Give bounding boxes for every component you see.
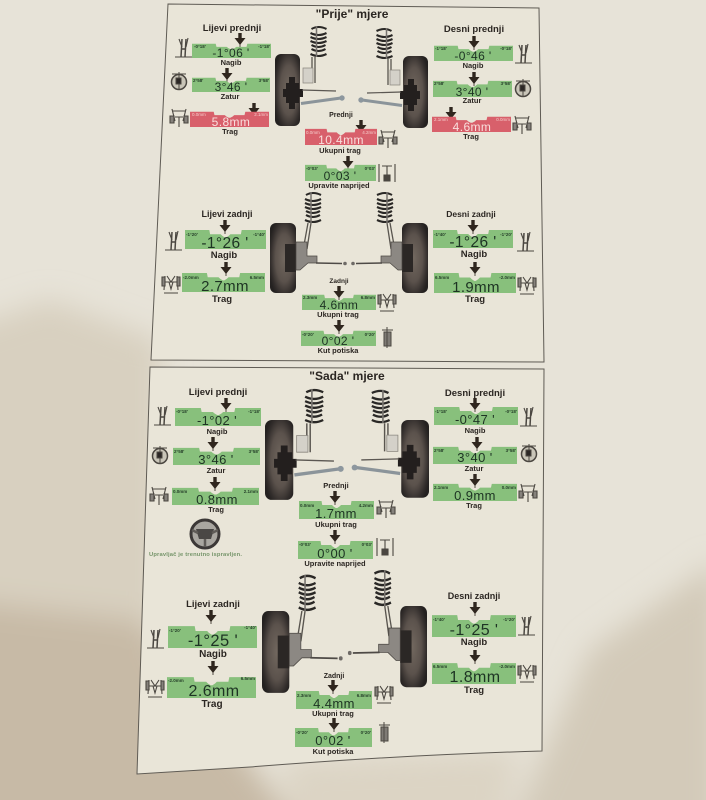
gauge: left front toe: 0.0mm [192, 112, 206, 117]
gauge: rear left camber: -1°40' [244, 625, 256, 630]
gauge: rear left toe: -2.0mm [183, 275, 199, 280]
icon: toe [518, 665, 536, 682]
arrow [468, 220, 478, 234]
icon: camber [520, 407, 537, 426]
icon: steer ahead [379, 164, 395, 182]
gauge: rear total toe: 6.8mm [361, 295, 375, 300]
gauge: steer ahead: 0°00 ' [317, 546, 353, 561]
gauge: steer ahead: 0°03 ' [324, 169, 356, 183]
gauge: left front toe: 2.1mm [254, 112, 268, 117]
panel: "Prije" measurements [151, 4, 544, 362]
gauge: right front caster: 3°40 ' [456, 85, 488, 99]
arrow [330, 491, 340, 505]
gauge: left front camber: -1°18' [248, 409, 260, 414]
gauge: rear right camber: -1°26 ' [449, 234, 497, 251]
gauge: thrust angle: 0°02 ' [322, 334, 354, 348]
arrow [220, 262, 232, 276]
label: Nagib: Nagib [461, 249, 487, 260]
gauge: right front caster: 2°58' [434, 448, 444, 453]
label: Kut potiska: Kut potiska [318, 346, 359, 355]
gauge: rear total toe: 4.6mm [320, 298, 358, 312]
arrow [220, 220, 230, 234]
gauge: rear left camber: -1°20' [186, 232, 198, 237]
rear right suspension [348, 570, 427, 687]
gauge: thrust angle [295, 728, 372, 748]
label: Nagib: Nagib [207, 427, 228, 436]
label: Ukupni trag: Ukupni trag [312, 709, 354, 718]
heading: Desni zadnji: Desni zadnji [448, 591, 500, 601]
icon: camber [165, 231, 182, 250]
gauge: right front toe: 2.1mm [434, 117, 448, 122]
label: Upravite naprijed: Upravite naprijed [304, 559, 366, 568]
icon: steering wheel [191, 520, 219, 548]
gauge: right front toe: 4.6mm [453, 120, 491, 134]
label: Zadnji: Zadnji [329, 278, 349, 285]
label: Zatur: Zatur [221, 92, 239, 101]
gauge: left front toe: 2.1mm [244, 489, 258, 494]
gauge: left front camber: -1°02 ' [197, 413, 237, 428]
gauge: rear left camber: -1°20' [169, 628, 181, 633]
gauge: left front toe: 0.8mm [196, 492, 238, 507]
arrow [208, 661, 218, 675]
gauge: right front camber: -0°47 ' [455, 412, 495, 427]
gauge: right front toe: 0.9mm [454, 488, 496, 503]
gauge: front total toe: 10.4mm [318, 133, 364, 147]
gauge: front total toe [299, 501, 374, 521]
heading: Desni zadnji: Desni zadnji [446, 209, 496, 219]
label: Nagib: Nagib [221, 58, 242, 67]
front left suspension [265, 389, 344, 500]
label: Trag: Trag [208, 505, 224, 514]
gauge: left front camber: -1°18' [258, 44, 270, 49]
heading: Lijevi zadnji: Lijevi zadnji [186, 599, 240, 610]
icon: toe [170, 109, 188, 127]
gauge: front total toe: 0.0mm [306, 130, 320, 135]
gauge: rear right camber: -1°20' [500, 232, 512, 237]
gauge: thrust angle: 0°20' [365, 332, 375, 337]
gauge: rear left camber [185, 230, 266, 252]
gauge: front total toe: 1.7mm [315, 506, 357, 521]
icon: toe [519, 484, 537, 502]
gauge: right front camber: -0°18' [505, 409, 517, 414]
rear left suspension [262, 575, 343, 693]
heading: Lijevi prednji: Lijevi prednji [203, 23, 261, 34]
label: Prednji: Prednji [329, 112, 353, 119]
gauge: right front toe [432, 117, 511, 134]
gauge: steer ahead: 0°03' [365, 166, 375, 171]
arrow [222, 68, 232, 82]
gauge: right front camber: -1°18' [435, 46, 447, 51]
gauge: rear right camber [432, 615, 516, 639]
gauge: right front caster: 3°40 ' [457, 450, 493, 465]
gauge: left front caster [192, 78, 270, 94]
gauge: left front caster [173, 448, 260, 467]
gauge: right front caster: 3°58' [501, 81, 511, 86]
heading: Desni prednji: Desni prednji [444, 24, 504, 35]
icon: camber [154, 406, 171, 425]
icon: camber [517, 232, 534, 251]
arrow [472, 437, 482, 451]
gauge: rear left camber: -1°26 ' [201, 235, 249, 252]
gauge: rear total toe: 4.4mm [313, 696, 355, 711]
gauge: rear total toe: 2.3mm [297, 693, 311, 698]
label: Nagib: Nagib [211, 250, 237, 261]
gauge: right front camber [434, 46, 513, 63]
icon: thrust [379, 722, 390, 743]
gauge: thrust angle [301, 331, 376, 348]
gauge: right front toe: 2.1mm [434, 485, 448, 490]
arrow [234, 33, 246, 47]
label: Zatur: Zatur [463, 96, 481, 105]
arrow [446, 107, 456, 121]
gauge: steer ahead: 0°03' [362, 542, 372, 547]
gauge: left front camber: -0°18' [194, 44, 206, 49]
arrow [470, 262, 480, 276]
label: Zatur: Zatur [465, 464, 483, 473]
arrow [468, 72, 480, 86]
gauge: rear left camber [168, 625, 257, 650]
gauge: rear left toe: 2.7mm [201, 278, 249, 295]
icon: total toe [377, 500, 395, 518]
gauge: left front toe: 0.0mm [173, 489, 187, 494]
gauge: thrust angle: -0°20' [296, 730, 308, 735]
icon: caster [172, 72, 186, 90]
gauge: left front camber [192, 44, 271, 60]
gauge: rear right camber: -1°20' [503, 617, 515, 622]
icon: camber [518, 616, 535, 635]
front right suspension [358, 28, 428, 128]
arrow [470, 602, 480, 616]
gauge: rear right toe [434, 273, 516, 296]
gauge: right front caster: 2°58' [434, 81, 444, 86]
gauge: steer ahead: -0°03' [299, 542, 311, 547]
gauge: thrust angle: -0°20' [302, 332, 314, 337]
title: Prije mjere: "Prije" mjere [316, 7, 389, 21]
label: Zadnji: Zadnji [324, 673, 344, 680]
gauge: front total toe: 4.2mm [359, 503, 373, 508]
gauge: rear total toe [302, 295, 376, 312]
gauge: right front toe: 0.0mm [496, 117, 510, 122]
arrow [468, 36, 480, 50]
gauge: right front camber: -0°18' [500, 46, 512, 51]
gauge: steer ahead [305, 165, 376, 183]
gauge: rear left toe: -2.0mm [168, 678, 184, 683]
gauge: rear left toe: 2.6mm [189, 683, 239, 700]
icon: camber [147, 629, 164, 648]
icon: steer ahead [377, 538, 393, 556]
icon: total toe [379, 130, 397, 148]
arrow [328, 680, 338, 694]
label: Trag: Trag [463, 132, 479, 141]
gauge: right front caster [433, 81, 512, 99]
gauge: steer ahead [298, 541, 373, 561]
gauge: left front caster: 3°58' [249, 449, 259, 454]
arrow [470, 398, 480, 412]
gauge: rear right toe: -2.0mm [499, 664, 515, 669]
heading: Lijevi prednji: Lijevi prednji [189, 387, 247, 398]
icon: total toe [378, 294, 396, 311]
icon: toe [150, 487, 168, 505]
gauge: thrust angle: 0°20' [361, 730, 371, 735]
gauge: left front caster: 2°58' [193, 78, 203, 83]
arrow [328, 718, 340, 732]
label: Trag: Trag [201, 699, 223, 710]
gauge: left front camber: -1°06 ' [212, 46, 250, 60]
label: Nagib: Nagib [463, 61, 484, 70]
gauge: rear total toe: 6.8mm [357, 693, 371, 698]
gauge: rear right toe: 1.9mm [452, 279, 500, 296]
gauge: left front camber: -0°18' [176, 409, 188, 414]
arrow [334, 320, 344, 334]
label: Prednji: Prednji [323, 481, 349, 490]
label: Nagib: Nagib [465, 426, 486, 435]
gauge: rear total toe: 2.3mm [303, 295, 317, 300]
gauge: right front caster [433, 447, 517, 465]
label: Ukupni trag: Ukupni trag [317, 310, 359, 319]
label: Trag: Trag [464, 685, 484, 696]
rear right suspension [351, 192, 428, 293]
label: Nagib: Nagib [461, 637, 487, 648]
gauge: rear right toe: 6.5mm [433, 664, 447, 669]
icon: caster [516, 79, 530, 96]
icon: toe [513, 116, 531, 134]
label: Zatur: Zatur [207, 466, 225, 475]
gauge: front total toe: 0.0mm [300, 503, 314, 508]
gauge: rear right camber [433, 230, 513, 251]
icon: toe [146, 680, 164, 697]
icon: total toe [375, 686, 393, 703]
gauge: rear right toe: -2.0mm [499, 275, 515, 280]
title: Sada mjere: "Sada" mjere [309, 369, 385, 383]
heading: Lijevi zadnji: Lijevi zadnji [201, 209, 253, 219]
label: Trag: Trag [465, 294, 485, 305]
label: Upravite naprijed: Upravite naprijed [308, 181, 370, 190]
arrow [330, 530, 340, 544]
arrow [206, 610, 216, 624]
icon: thrust [382, 327, 393, 348]
front right suspension [352, 390, 429, 498]
gauge: thrust angle: 0°02 ' [315, 733, 351, 748]
arrow [334, 286, 344, 300]
gauge: front total toe [305, 129, 377, 147]
gauge: right front toe: 0.0mm [502, 485, 516, 490]
front left suspension [275, 26, 345, 126]
gauge: rear right camber: -1°40' [434, 232, 446, 237]
arrow [248, 103, 260, 117]
label: Ukupni trag: Ukupni trag [315, 520, 357, 529]
label: Nagib: Nagib [199, 649, 227, 660]
label: Trag: Trag [212, 294, 232, 305]
gauge: rear left toe [182, 273, 265, 295]
icon: toe [518, 277, 536, 294]
arrow [356, 120, 366, 134]
gauge: right front camber: -1°18' [435, 409, 447, 414]
label: Trag: Trag [466, 501, 482, 510]
gauge: rear right camber: -1°40' [433, 617, 445, 622]
arrow [208, 437, 218, 451]
arrow [470, 474, 480, 488]
gauge: rear left camber: -1°40' [253, 232, 265, 237]
gauge: left front camber [175, 408, 261, 428]
gauge: right front caster: 3°58' [506, 448, 516, 453]
rear left suspension [270, 192, 347, 293]
icon: caster [522, 444, 536, 462]
gauge: right front camber [434, 407, 518, 427]
gauge: left front toe [172, 488, 259, 507]
gauge: rear left toe: 6.5mm [241, 676, 255, 681]
gauge: left front toe: 5.8mm [212, 115, 250, 129]
note: steering wheel straight: Upravljač je trenutno ispravljen. [149, 552, 242, 558]
gauge: left front caster: 3°58' [259, 78, 269, 83]
gauge: rear right toe: 1.8mm [450, 669, 500, 686]
gauge: right front toe [433, 484, 517, 503]
gauge: rear right toe [432, 663, 516, 686]
arrow [220, 398, 232, 412]
arrow [470, 650, 480, 664]
icon: toe [162, 276, 180, 293]
heading: Desni prednji: Desni prednji [445, 388, 505, 399]
gauge: left front caster: 3°46 ' [215, 80, 247, 94]
gauge: front total toe: 4.2mm [362, 130, 376, 135]
gauge: rear left camber: -1°25 ' [188, 632, 238, 650]
gauge: rear total toe [296, 691, 372, 711]
gauge: rear left toe [167, 676, 256, 700]
icon: camber [175, 38, 192, 57]
icon: camber [515, 44, 532, 63]
gauge: rear right toe: 6.5mm [435, 275, 449, 280]
gauge: rear left toe: 6.5mm [250, 275, 264, 280]
gauge: rear right camber: -1°25 ' [450, 622, 498, 639]
gauge: right front camber: -0°46 ' [454, 49, 492, 63]
gauge: left front caster: 2°58' [174, 449, 184, 454]
gauge: left front toe [190, 112, 269, 129]
label: Trag: Trag [222, 127, 238, 136]
gauge: left front caster: 3°46 ' [198, 452, 234, 467]
panel: "Sada" measurements [137, 367, 544, 774]
gauge: steer ahead: -0°03' [306, 166, 318, 171]
icon: caster [152, 446, 168, 464]
arrow [210, 477, 220, 491]
arrow [342, 156, 354, 170]
label: Ukupni trag: Ukupni trag [319, 146, 361, 155]
label: Kut potiska: Kut potiska [313, 747, 354, 756]
